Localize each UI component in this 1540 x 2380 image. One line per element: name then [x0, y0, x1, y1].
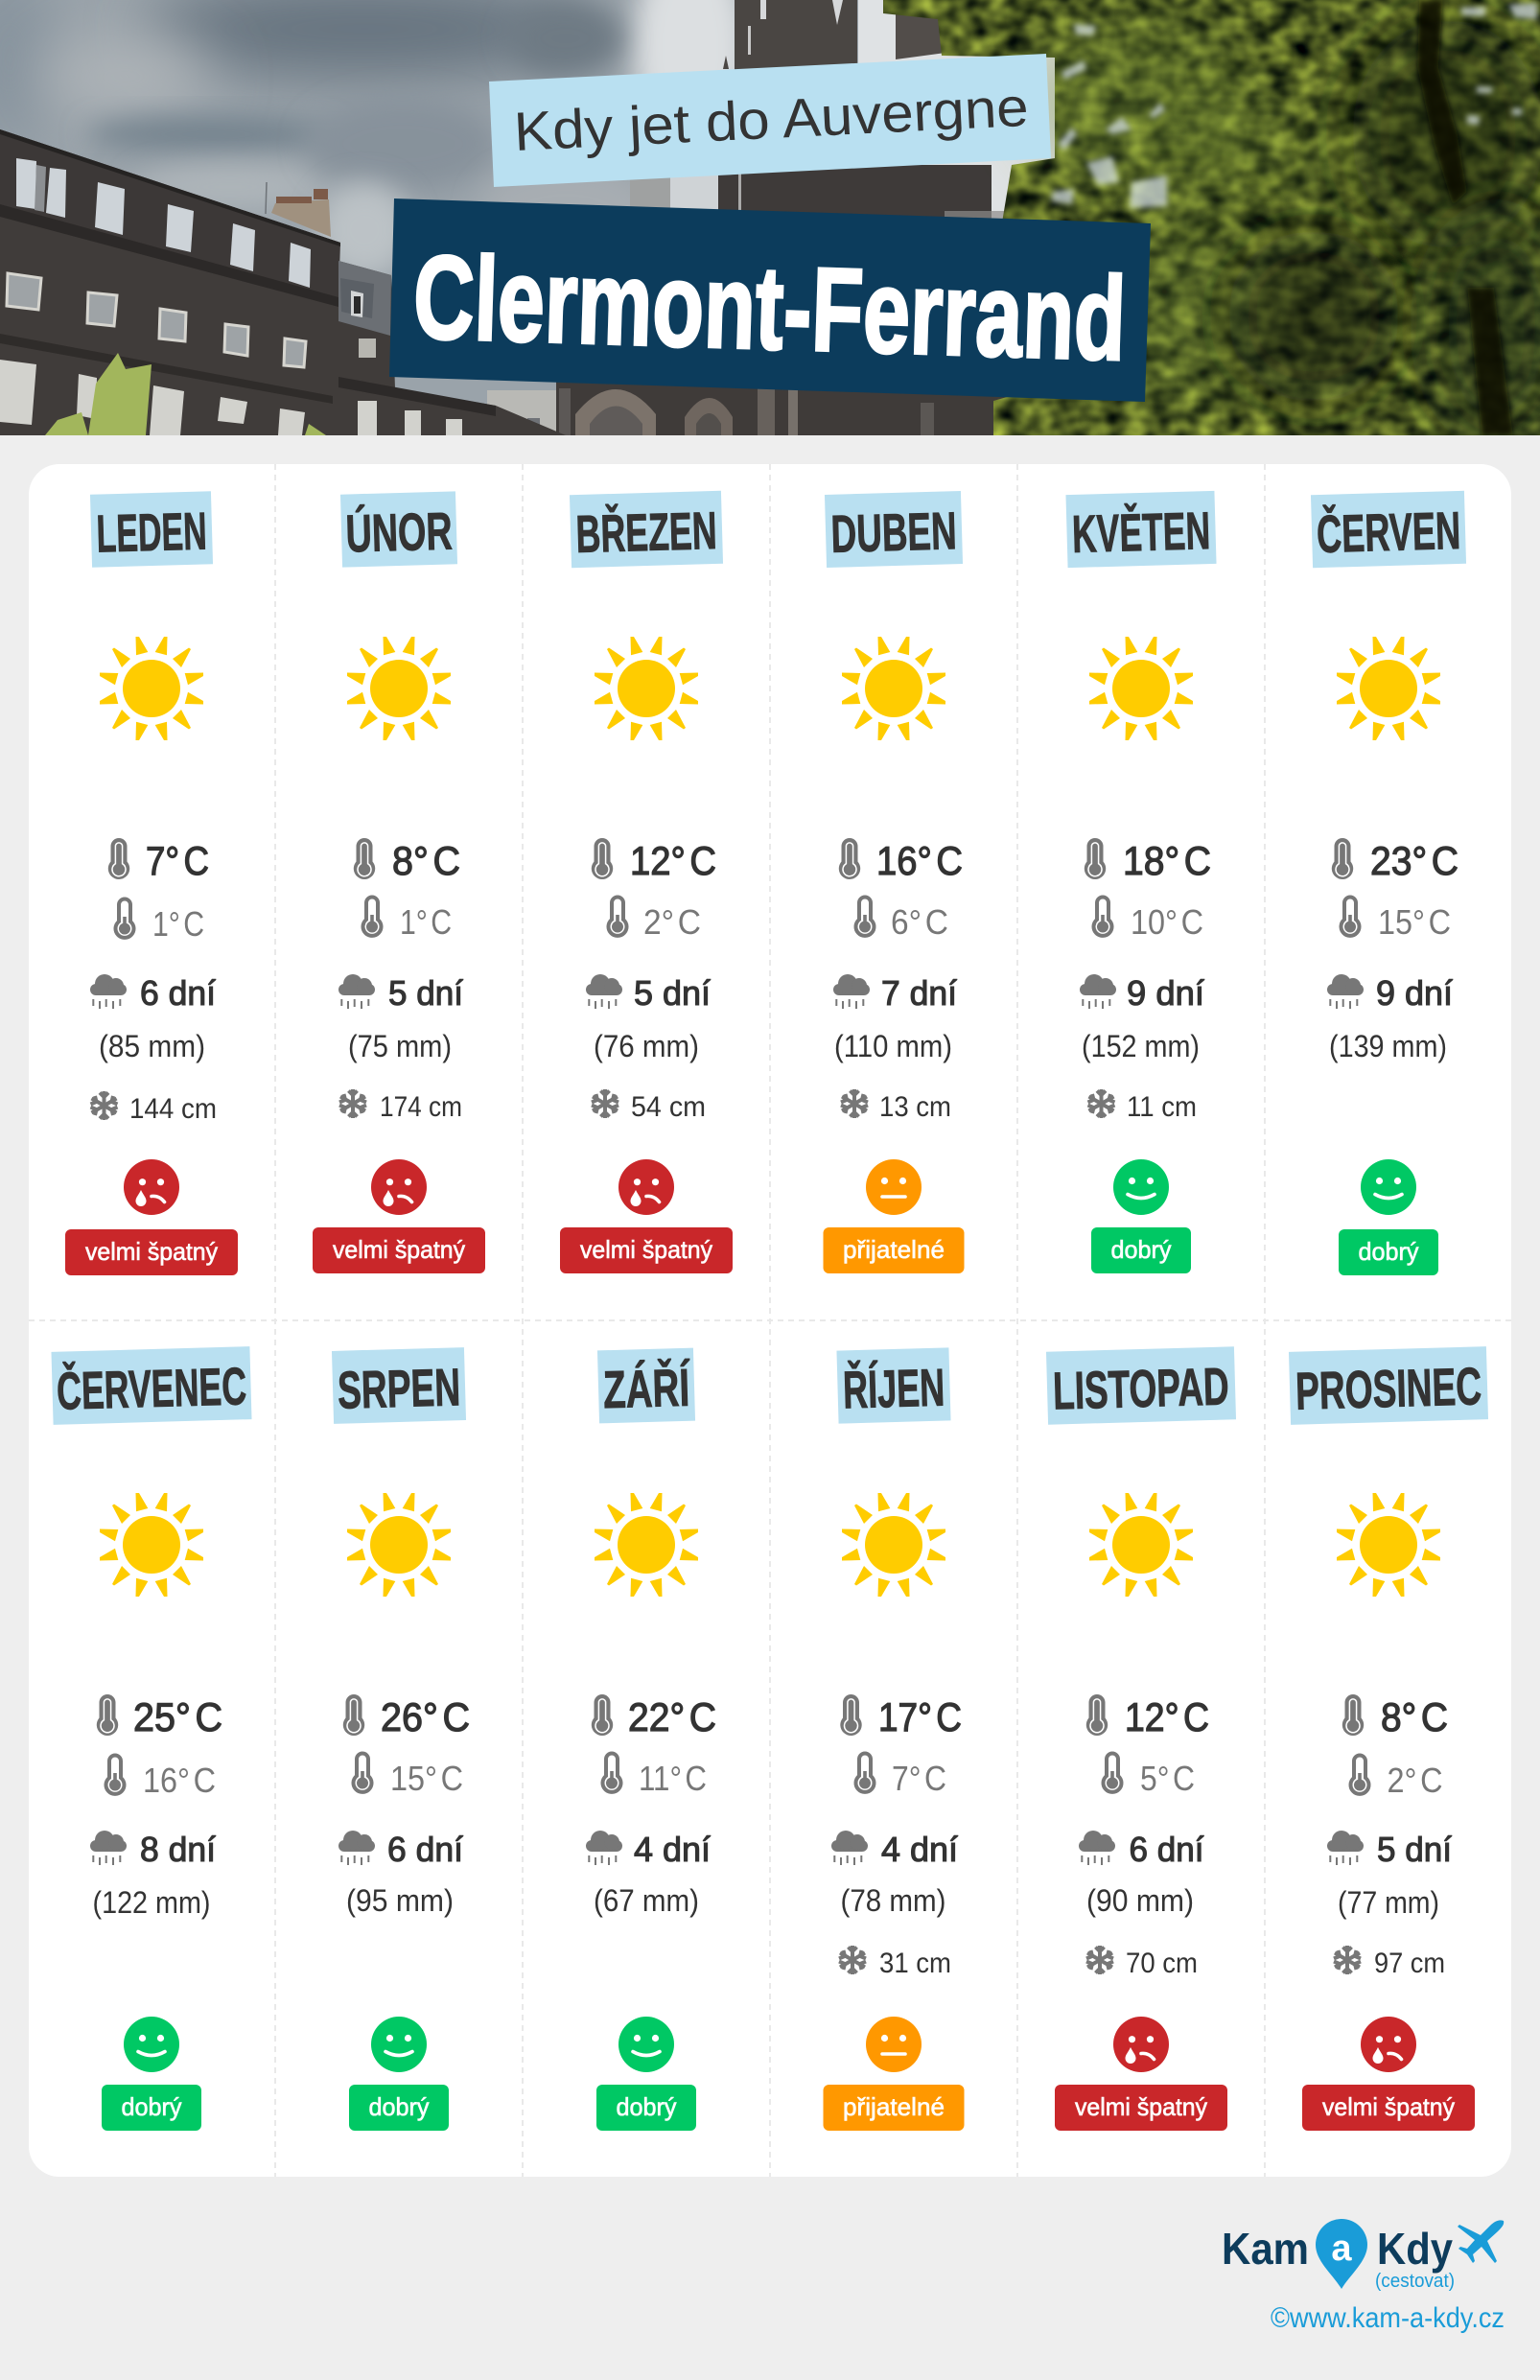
month tag: DUBEN	[830, 501, 957, 564]
rainy days	[1327, 973, 1453, 1013]
snowfall: 70 cm	[1126, 1948, 1198, 1979]
month tag: ČERVEN	[1316, 501, 1461, 564]
rainy days	[1080, 973, 1204, 1013]
low temperature	[1103, 1753, 1195, 1798]
month tag	[51, 1346, 252, 1425]
rainy days: 9 dní	[1127, 973, 1204, 1013]
snowfall	[1086, 1946, 1198, 1979]
subtitle banner: Kdy jet do Auvergne	[489, 54, 1051, 187]
rainy days: 8 dní	[140, 1830, 216, 1869]
snowfall: 54 cm	[631, 1091, 706, 1123]
rating badge	[349, 2085, 449, 2131]
high temperature	[1332, 838, 1458, 883]
rating face	[1113, 1159, 1169, 1215]
title banner: Clermont-Ferrand	[389, 198, 1151, 402]
icon: sun	[100, 1493, 203, 1597]
rating badge: dobrý	[1110, 1235, 1172, 1264]
high temperature: 8°C	[1381, 1694, 1448, 1739]
snowfall: 31 cm	[879, 1948, 951, 1979]
high temperature	[1086, 1694, 1209, 1739]
rating badge: velmi špatný	[1075, 2092, 1207, 2121]
chimney	[271, 199, 331, 237]
rating badge	[1302, 2085, 1475, 2131]
icon: airplane	[1458, 2220, 1504, 2263]
high temperature: 23°C	[1370, 838, 1458, 883]
rainfall: (77 mm)	[1338, 1885, 1439, 1920]
rating badge	[1091, 1227, 1191, 1273]
young street tree	[45, 353, 152, 435]
rating badge	[102, 2085, 201, 2131]
rainfall: (85 mm)	[99, 1029, 205, 1063]
subtitle banner: Kdy jet do Auvergne: Kdy jet do Auvergne	[513, 77, 1030, 163]
rating badge: přijatelné	[843, 1235, 945, 1264]
rainy days	[831, 1830, 958, 1869]
month cell: DUBEN	[823, 491, 965, 1273]
low temperature: 7°C	[892, 1759, 946, 1798]
snowfall	[592, 1089, 706, 1123]
attic shutters	[16, 158, 311, 288]
main white card	[29, 464, 1511, 2177]
rainy days	[338, 973, 463, 1013]
high temperature: 22°C	[628, 1694, 716, 1739]
rainfall: (110 mm)	[834, 1029, 952, 1063]
high temperature: 7°C	[146, 838, 209, 883]
low temperature	[1341, 898, 1451, 942]
rainfall: (152 mm)	[1082, 1029, 1200, 1063]
high temperature	[592, 1694, 716, 1739]
rating face	[1361, 2017, 1416, 2072]
rating face	[1361, 1159, 1416, 1215]
rating badge	[1055, 2085, 1227, 2131]
rating face	[1113, 2017, 1169, 2072]
snowfall: 11 cm	[1127, 1091, 1197, 1123]
cathedral towers and portal	[487, 0, 1036, 436]
high temperature	[97, 1694, 222, 1739]
snowfall	[1087, 1089, 1197, 1123]
icon: sun	[842, 637, 945, 740]
month tag	[836, 1347, 951, 1424]
month tag	[1046, 1346, 1236, 1425]
month cell: ÚNOR	[313, 491, 485, 1273]
high temperature: 8°C	[392, 838, 460, 883]
high temperature	[592, 838, 716, 883]
month cell: BŘEZEN	[560, 491, 733, 1273]
rating face	[866, 1159, 922, 1215]
rating badge: dobrý	[1358, 1237, 1419, 1266]
rainy days	[338, 1830, 463, 1869]
high temperature: 12°C	[1125, 1694, 1209, 1739]
rainy days: 7 dní	[881, 973, 957, 1013]
sky gaps in foliage	[1052, 3, 1537, 208]
month tag	[340, 491, 457, 568]
month cell: PROSINEC	[1289, 1346, 1488, 2131]
low temperature: 16°C	[143, 1761, 216, 1800]
low temperature	[115, 899, 204, 944]
rainfall: (76 mm)	[594, 1029, 699, 1063]
rainy days	[90, 973, 216, 1013]
rainfall: (67 mm)	[594, 1883, 699, 1918]
rating badge: velmi špatný	[85, 1237, 218, 1266]
snowfall	[90, 1091, 217, 1125]
month tag	[825, 491, 963, 568]
logo: Kam a Kdy (cestovat): (cestovat)	[1375, 2271, 1455, 2292]
high temperature: 26°C	[381, 1694, 470, 1739]
month tag: ČERVENEC	[56, 1356, 247, 1421]
rating badge	[65, 1229, 238, 1275]
snowfall	[1334, 1946, 1445, 1979]
low temperature: 11°C	[639, 1759, 707, 1798]
month tag: LISTOPAD	[1052, 1356, 1229, 1421]
icon: sun	[595, 1493, 698, 1597]
low temperature: 5°C	[1140, 1759, 1195, 1798]
low temperature: 2°C	[1387, 1761, 1442, 1800]
high temperature: 17°C	[878, 1694, 962, 1739]
month tag	[570, 491, 723, 568]
rating face	[866, 2017, 922, 2072]
rainfall: (90 mm)	[1086, 1883, 1194, 1918]
month tag	[1311, 491, 1466, 568]
rainfall: (78 mm)	[840, 1883, 945, 1918]
month cell: ČERVENEC	[51, 1346, 252, 2131]
middle row windows	[7, 273, 306, 367]
icon: sun	[100, 637, 203, 740]
rainy days: 5 dní	[1377, 1830, 1452, 1869]
low temperature: 15°C	[1378, 902, 1451, 942]
month cell: ZÁŘÍ	[586, 1348, 716, 2131]
month tag: KVĚTEN	[1071, 501, 1211, 564]
snowfall	[841, 1089, 951, 1123]
month cell: ČERVEN	[1311, 491, 1466, 1275]
rating badge	[313, 1227, 485, 1273]
high temperature	[354, 838, 460, 883]
rating badge	[560, 1227, 733, 1273]
left building block	[0, 129, 566, 435]
high temperature	[108, 838, 209, 883]
icon: sun	[842, 1493, 945, 1597]
low temperature	[1093, 898, 1203, 942]
logo: Kam a Kdy (cestovat)	[1222, 2219, 1504, 2292]
rating face	[618, 2017, 674, 2072]
hero photo: Clermont-Ferrand street with cathedral and tree	[0, 0, 1540, 441]
month tag: LEDEN	[96, 501, 207, 564]
icon: sun	[595, 637, 698, 740]
low temperature: 15°C	[390, 1759, 463, 1798]
snowfall	[839, 1946, 951, 1979]
icon: sun	[1337, 637, 1440, 740]
month cell: ŘÍJEN	[823, 1347, 965, 2131]
rating face	[124, 2017, 179, 2072]
snowfall	[339, 1089, 462, 1123]
snowfall: 144 cm	[129, 1093, 217, 1125]
high temperature: 16°C	[876, 838, 963, 883]
month tag: BŘEZEN	[575, 501, 717, 564]
rating badge	[596, 2085, 696, 2131]
low temperature	[608, 898, 701, 942]
rainy days: 9 dní	[1376, 973, 1453, 1013]
high temperature	[1342, 1694, 1448, 1739]
month tag: ZÁŘÍ	[602, 1358, 691, 1419]
high temperature	[839, 838, 963, 883]
low temperature: 2°C	[643, 902, 701, 942]
icon: sun	[1337, 1493, 1440, 1597]
month cell: SRPEN	[332, 1347, 470, 2131]
rainy days	[90, 1830, 216, 1869]
low temperature	[362, 898, 452, 942]
rating badge	[1339, 1229, 1438, 1275]
rainy days	[833, 973, 957, 1013]
month cell: LISTOPAD	[1046, 1346, 1236, 2131]
month tag: ÚNOR	[345, 501, 453, 564]
rainy days: 6 dní	[1130, 1830, 1204, 1869]
icon: map pin	[1316, 2219, 1367, 2289]
high temperature: 25°C	[133, 1694, 222, 1739]
low temperature: 10°C	[1131, 902, 1203, 942]
rating badge: velmi špatný	[333, 1235, 465, 1264]
rating face	[124, 1159, 179, 1215]
month tag	[1065, 491, 1217, 568]
low temperature	[105, 1755, 216, 1800]
rainy days: 6 dní	[387, 1830, 463, 1869]
snowfall: 174 cm	[380, 1091, 462, 1123]
snowfall: 97 cm	[1374, 1948, 1445, 1979]
low temperature	[602, 1753, 707, 1798]
rating badge	[823, 2085, 965, 2131]
high temperature	[840, 1694, 962, 1739]
low temperature	[353, 1753, 463, 1798]
icon: sun	[1089, 637, 1193, 740]
month cell: LEDEN	[65, 491, 238, 1275]
rainy days: 4 dní	[881, 1830, 958, 1869]
low temperature: 1°C	[152, 904, 204, 944]
icon: sun	[347, 637, 451, 740]
month tag	[1289, 1346, 1488, 1425]
website credit: ©www.kam-a-kdy.cz	[1271, 2302, 1505, 2334]
rating badge: přijatelné	[843, 2092, 945, 2121]
low temperature	[1350, 1755, 1442, 1800]
lower row windows	[0, 338, 462, 435]
tree foliage	[883, 0, 1540, 441]
low temperature: 1°C	[400, 902, 452, 942]
rating badge: dobrý	[616, 2092, 677, 2121]
rainy days	[586, 973, 711, 1013]
high temperature	[1085, 838, 1211, 883]
high temperature: 18°C	[1123, 838, 1211, 883]
rainy days	[1327, 1830, 1452, 1869]
month tag	[90, 491, 213, 568]
month tag: SRPEN	[337, 1357, 461, 1420]
rainfall: (95 mm)	[346, 1883, 454, 1918]
rainfall: (139 mm)	[1329, 1029, 1447, 1063]
icon: sun	[347, 1493, 451, 1597]
rainy days: 5 dní	[388, 973, 463, 1013]
logo: Kam a Kdy (cestovat): Kam	[1222, 2224, 1309, 2274]
rating badge: dobrý	[368, 2092, 430, 2121]
rainfall: (75 mm)	[348, 1029, 452, 1063]
low temperature	[855, 1753, 946, 1798]
rainy days	[586, 1830, 711, 1869]
month tag: ŘÍJEN	[842, 1358, 945, 1419]
rating face	[618, 1159, 674, 1215]
title banner: Clermont-Ferrand: Clermont-Ferrand	[411, 231, 1128, 385]
logo: Kam a Kdy (cestovat): Kdy	[1377, 2224, 1453, 2274]
high temperature: 12°C	[630, 838, 716, 883]
icon: sun	[1089, 1493, 1193, 1597]
rainy days: 4 dní	[634, 1830, 711, 1869]
rainy days	[1079, 1830, 1204, 1869]
rating face	[371, 2017, 427, 2072]
sky with storm clouds	[0, 0, 1060, 435]
rating badge: velmi špatný	[580, 1235, 712, 1264]
icon: map pin: a	[1331, 2228, 1352, 2269]
rainy days: 5 dní	[634, 973, 711, 1013]
rating badge	[823, 1227, 965, 1273]
rating badge: dobrý	[121, 2092, 182, 2121]
snowfall: 13 cm	[879, 1091, 951, 1123]
rainy days: 6 dní	[140, 973, 216, 1013]
month tag	[597, 1348, 695, 1423]
rating badge: velmi špatný	[1322, 2092, 1455, 2121]
high temperature	[343, 1694, 470, 1739]
month tag	[332, 1347, 466, 1424]
low temperature	[855, 898, 948, 942]
rainfall: (122 mm)	[92, 1885, 211, 1920]
low temperature: 6°C	[891, 902, 948, 942]
rating face	[371, 1159, 427, 1215]
month cell: KVĚTEN	[1065, 491, 1217, 1273]
